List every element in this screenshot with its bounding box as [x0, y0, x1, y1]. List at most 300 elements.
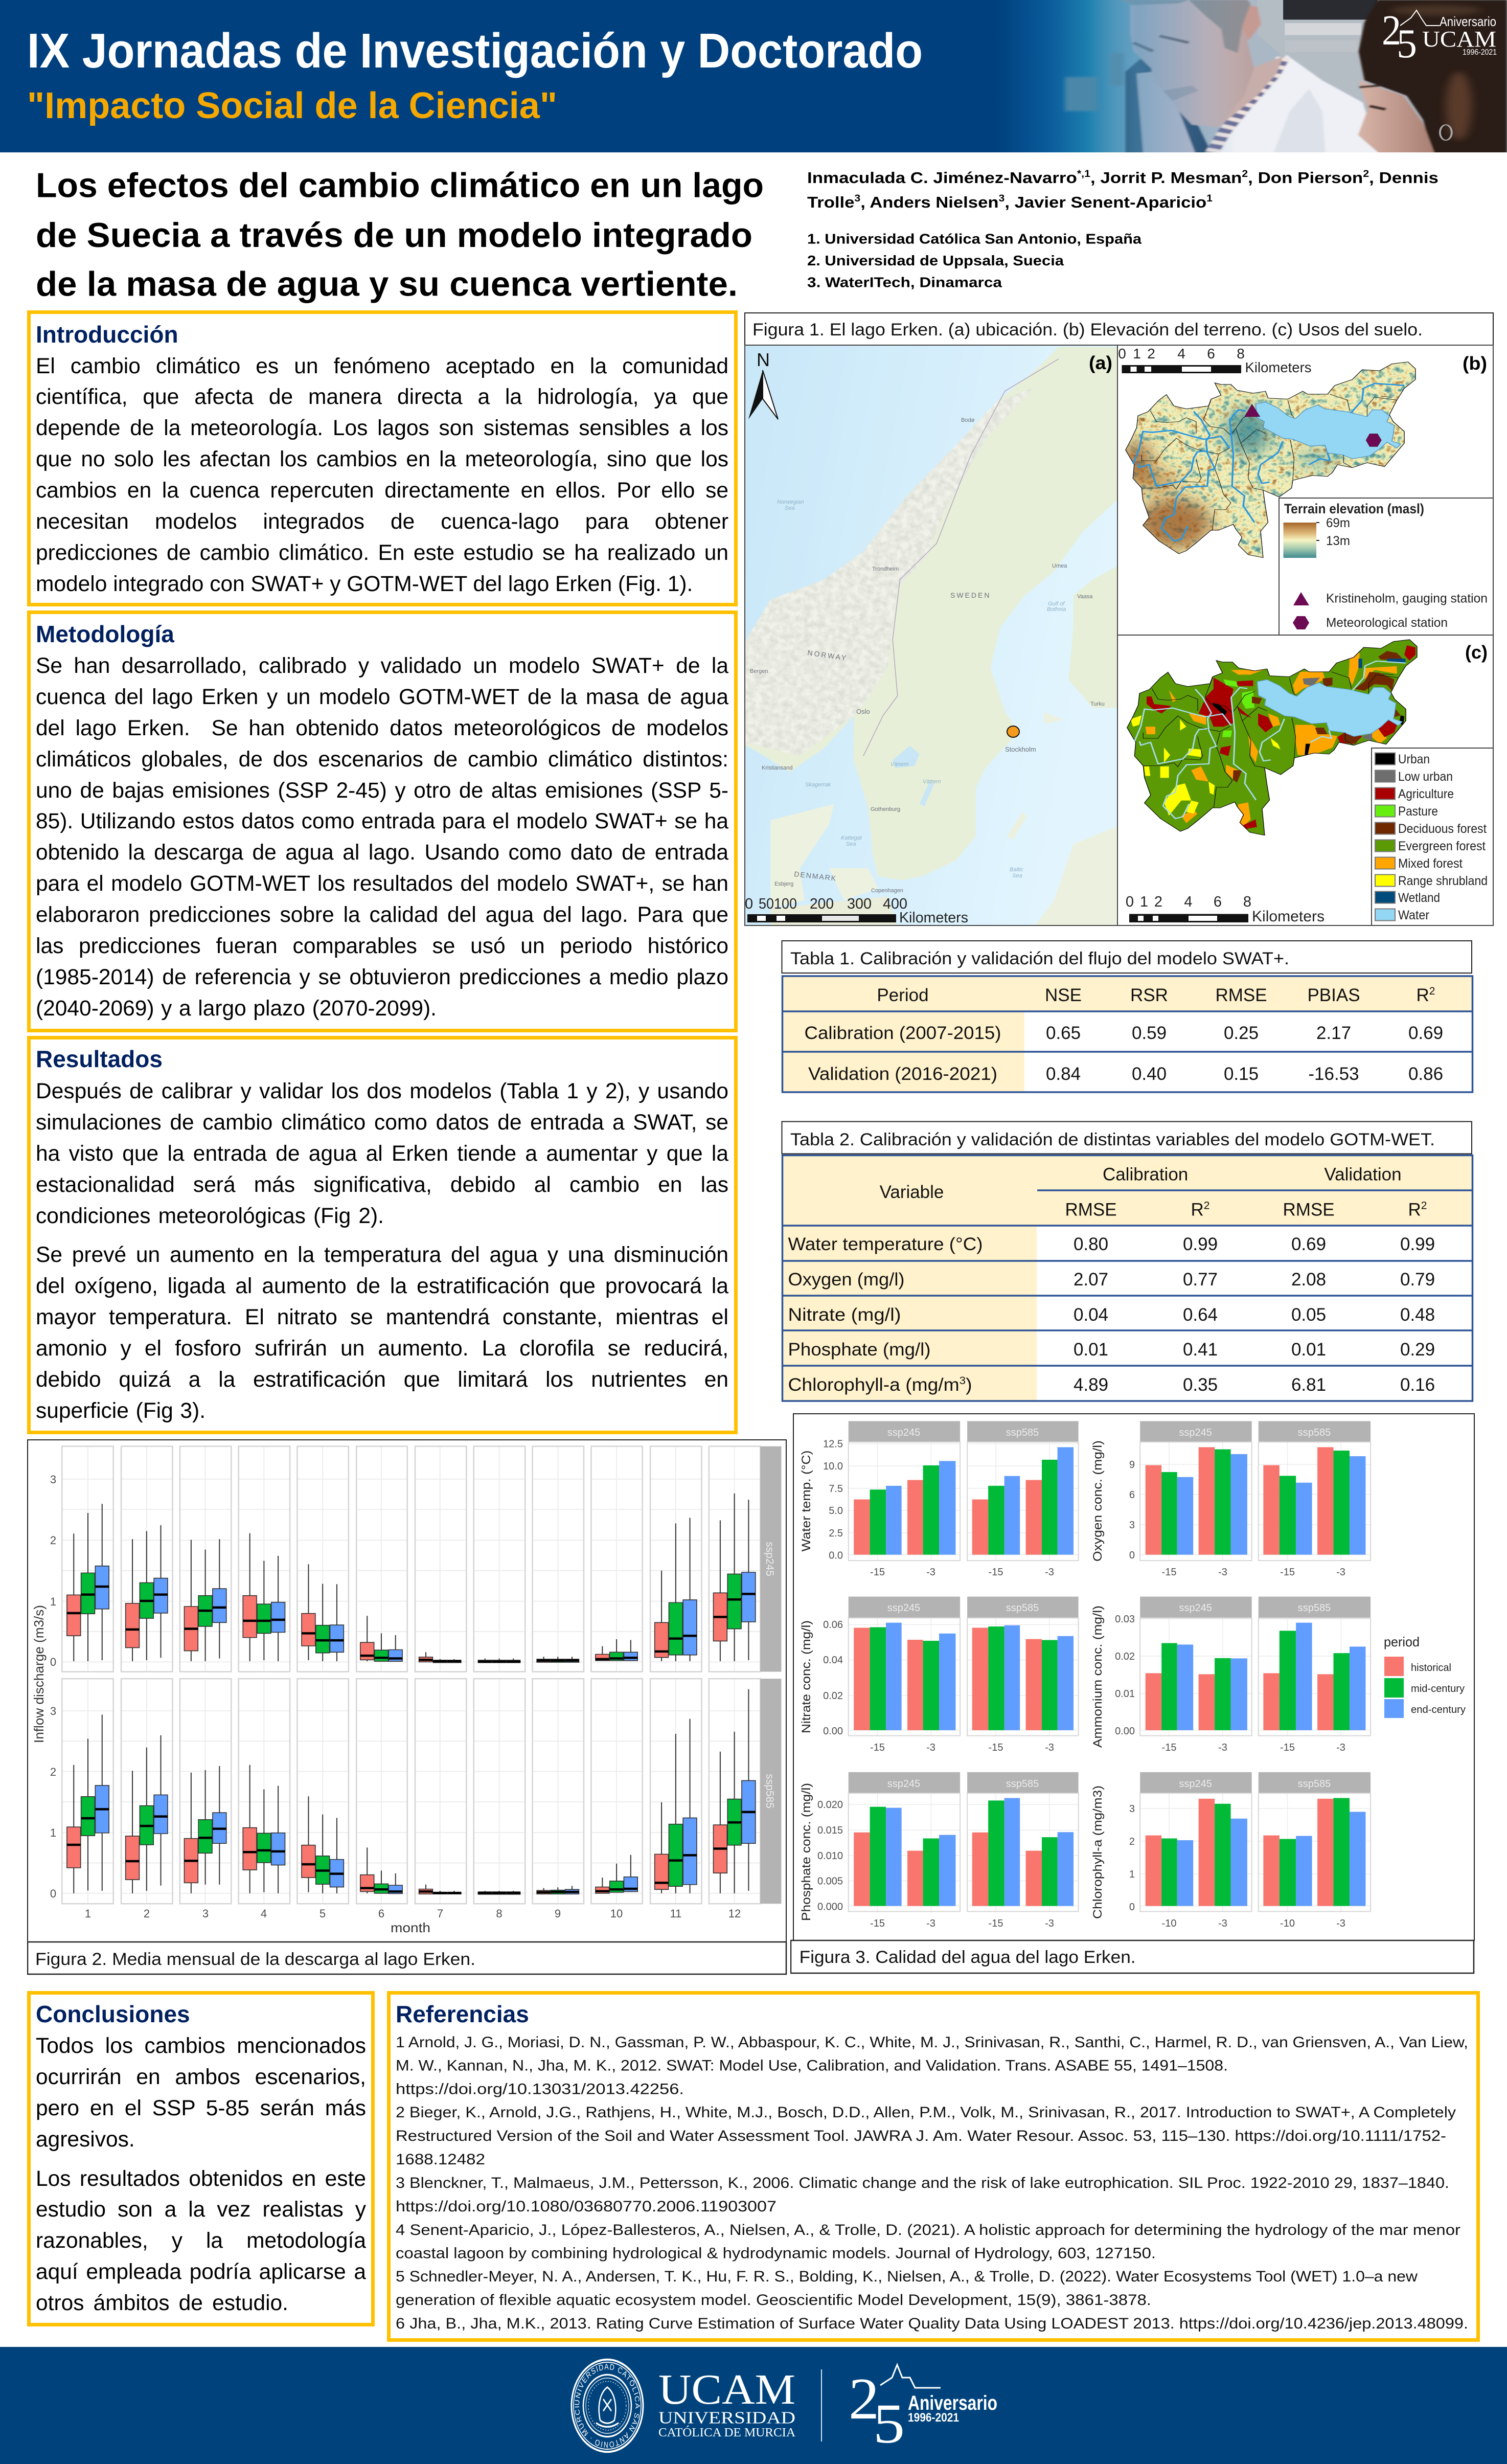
chart row 1: water temperature and oxygen: -15 — [1280, 1567, 1295, 1578]
authors and affiliations: 3 — [854, 193, 860, 204]
heading: conclusiones: Conclusiones — [36, 2001, 190, 2027]
scale bar a: 300 — [847, 896, 872, 912]
chart row 3: phosphate and chlorophyll: 0.005 — [817, 1875, 843, 1887]
chart row 1: water temperature and oxygen: ssp585 — [1006, 1427, 1039, 1438]
chart row 2: nitrate and ammonium: -3 — [926, 1742, 935, 1753]
text: conclusiones: pero en el SSP 5-85 serán más — [36, 2096, 366, 2120]
text: conclusiones: agresivos. — [36, 2128, 135, 2152]
map labels: Vänern — [890, 761, 908, 767]
reference list: 5 Schnedler-Meyer, N. A., Andersen, T. K., Hu, F. R. S., Bolding, K., Nielsen, A., & Trolle, D. (2022). Water Ecosystems Tool (WET) 1.0–a new — [396, 2268, 1418, 2285]
figure 3 frame — [793, 1414, 1474, 1940]
table 2 body: Calibration — [1103, 1165, 1188, 1185]
boxes: end-century — [95, 1566, 756, 1894]
map labels: Umea — [1052, 563, 1067, 569]
text: metodología: del lago Erken. Se han obtenido datos meteorológicos de modelos — [36, 716, 728, 740]
table 1 caption — [782, 941, 1472, 973]
table 1 body: 0.69 — [1408, 1023, 1443, 1043]
chart row 3: phosphate and chlorophyll: 2 — [1129, 1836, 1135, 1847]
logo: university seal: UNIVERSIDAD CATÓLICA SAN ANTONIO · MURCIA · — [575, 2364, 640, 2448]
table 1 body: Calibration (2007-2015) — [805, 1023, 1001, 1043]
reference list: coastal lagoon by combining hydrological & hydrodynamic models. Journal of Hydrology, 603, 127150. — [396, 2245, 1156, 2262]
chart row 3: phosphate and chlorophyll: -3 — [1045, 1918, 1054, 1929]
table 2 body — [782, 1156, 1472, 1401]
reference list: 1 Arnold, J. G., Moriasi, D. N., Gassman, P. W., Abbaspour, K. C., White, M. J., Srinivasan, R., Santhi, C., Harmel, R. D., van Griensven, A., Van Liew, — [396, 2034, 1468, 2051]
logo: 25 aniversario UCAM: Aniversario — [1440, 14, 1496, 29]
map a: location of lake Erken in Sweden — [741, 345, 1122, 926]
chart row 2: nitrate and ammonium: -3 — [1045, 1742, 1054, 1753]
chart row 3: phosphate and chlorophyll: -15 — [989, 1918, 1003, 1929]
text: resultados: Después de calibrar y validar los dos modelos (Tabla 1 y 2), y usando — [36, 1079, 728, 1103]
scale bar b: 4 — [1177, 346, 1185, 361]
icon: north arrow — [748, 349, 778, 419]
authors and affiliations: Trolle — [807, 193, 850, 211]
y axis labels: 0 — [50, 1887, 56, 1900]
text: introducción — [36, 354, 728, 596]
map labels: Sea — [785, 505, 795, 511]
event title: IX Jornadas de Investigación y Doctorado — [27, 24, 923, 78]
table 1 body: Validation (2016-2021) — [808, 1064, 997, 1084]
strip labels: ssp585 — [764, 1774, 775, 1809]
chart row 1: water temperature and oxygen: -3 — [1045, 1567, 1054, 1578]
table 2 body: 0.69 — [1291, 1234, 1326, 1254]
x axis labels: 9 — [555, 1907, 561, 1920]
authors and affiliations: , Anders Nielsen — [860, 193, 999, 211]
text: resultados: estacionalidad será más significativa, debido al cambio en las — [36, 1173, 728, 1197]
text: metodología: obtenido la descarga de agua al lago. Usando como dato de entrada — [36, 841, 728, 865]
logo: UCAM wordmark: UCAM — [658, 2366, 795, 2413]
x axis labels: 4 — [261, 1907, 267, 1920]
map labels: NORWAY — [807, 648, 848, 662]
table 2 body: Water temperature (°C) — [788, 1234, 983, 1254]
figure 2 caption — [28, 1942, 786, 1974]
table 1 body: RMSE — [1215, 985, 1267, 1005]
table 1 body: 2 — [1429, 985, 1435, 997]
chart row 2: nitrate and ammonium: ssp585 — [1006, 1602, 1039, 1614]
reference list: 2 Bieger, K., Arnold, J.G., Rathjens, H., White, M.J., Bosch, D.D., Allen, P.M., Volk, M., Srinivasan, R., 2017. Introduction to SWAT+, A Completely — [396, 2104, 1456, 2121]
map c: land use — [1117, 635, 1493, 925]
authors and affiliations: *,1 — [1077, 169, 1090, 179]
text: resultados: Se prevé un aumento en la temperatura del agua y una disminución — [36, 1243, 728, 1267]
figure 1 caption — [745, 313, 1493, 345]
marker: lake Erken location — [1007, 726, 1019, 737]
text: introducción: necesitan modelos integrados de cuenca-lago para obtener — [36, 510, 728, 534]
label b: (b) — [1463, 353, 1487, 374]
authors and affiliations: 3. WaterITech, Dinamarca — [807, 274, 1002, 290]
x axis labels: 5 — [319, 1907, 326, 1920]
map labels: Gothenburg — [871, 806, 900, 812]
table 2 body: R — [1191, 1200, 1204, 1220]
text: conclusiones: razonables, y la metodología — [36, 2229, 366, 2253]
panel: referencias — [387, 1991, 1480, 2342]
chart legend: period: historical — [1411, 1662, 1451, 1674]
header photo — [997, 0, 1507, 153]
map labels: Gulf of — [1048, 601, 1065, 607]
table 1 body: NSE — [1045, 985, 1082, 1005]
x axis labels: 1 — [85, 1907, 91, 1920]
legend c: Deciduous forest — [1398, 822, 1487, 836]
x axis labels: 7 — [437, 1907, 443, 1920]
event subtitle: "Impacto Social de la Ciencia" — [27, 85, 557, 126]
y axis labels: 3 — [50, 1473, 56, 1486]
table 1 body: 0.15 — [1224, 1064, 1259, 1084]
table 2 body: 2 — [1204, 1200, 1209, 1212]
chart row 2: nitrate and ammonium: ssp245 — [1179, 1602, 1212, 1614]
heading: metodología: Metodología — [36, 621, 174, 647]
chart row 3: phosphate and chlorophyll: ssp245 — [1179, 1778, 1212, 1790]
poster title: de Suecia a través de un modelo integrado — [36, 216, 752, 255]
map labels: Sea — [1012, 873, 1022, 879]
text: conclusiones — [36, 2031, 366, 2319]
scale bar b — [1118, 346, 1312, 375]
logo: 25 aniversario UCAM: UCAM — [1422, 27, 1496, 52]
panel: metodología — [27, 611, 738, 1032]
marker: meteorological station — [1366, 434, 1382, 447]
table 2 body: 0.29 — [1400, 1340, 1435, 1360]
text: metodología: (1985-2014) de referencia y se obtuvieron predicciones a medio plazo — [36, 965, 728, 989]
map labels: Bodø — [961, 417, 975, 423]
heading: referencias: Referencias — [396, 2001, 529, 2027]
table 2 body: R — [1408, 1200, 1421, 1220]
text: metodología — [36, 654, 728, 1021]
map labels: SWEDEN — [950, 591, 991, 599]
authors and affiliations: 2 — [1242, 169, 1248, 179]
x axis labels — [85, 1907, 741, 1935]
chart row 1: water temperature and oxygen: ssp245 — [1179, 1427, 1212, 1438]
legend c: Agriculture — [1398, 787, 1454, 801]
text: resultados — [36, 1079, 728, 1423]
table 2 body: 0.99 — [1400, 1234, 1435, 1254]
text: metodología: elaboraron predicciones sobre la calidad del agua del lago. Para que — [36, 903, 728, 927]
map labels: Trondheim — [872, 566, 899, 572]
x axis labels: 3 — [202, 1907, 209, 1920]
map labels: Oslo — [856, 708, 870, 715]
table 2 body: 6.81 — [1291, 1375, 1326, 1395]
map labels: Kristiansand — [762, 765, 793, 771]
reference list: Restructured Version of the Soil and Water Assessment Tool. JAWRA J. Am. Water Resour. Assoc. 53, 115–130. https://doi.org/10.1111/1752- — [396, 2128, 1446, 2144]
logo: 25 aniversario UCAM: 2 — [1382, 7, 1401, 54]
table 1 body: 0.59 — [1132, 1023, 1167, 1043]
text: introducción: El cambio climático es un fenómeno aceptado en la comunidad — [36, 354, 728, 378]
scale bar c: 1 — [1140, 894, 1148, 910]
chart row 3: phosphate and chlorophyll — [800, 1772, 1371, 1929]
legend c: Mixed forest — [1398, 856, 1463, 871]
table 2 body: 2 — [1421, 1200, 1427, 1212]
logo: 25 aniversario — [849, 2365, 997, 2455]
text: introducción: depende de la meteorología. Los lagos son sistemas sensibles a los — [36, 416, 728, 440]
chart row 3: phosphate and chlorophyll: ssp585 — [1006, 1778, 1039, 1790]
legend c: Pasture — [1398, 804, 1438, 819]
authors and affiliations: 2 — [1363, 169, 1369, 179]
logo: 25 aniversario: 5 — [873, 2392, 905, 2455]
footer band with logos — [0, 2347, 1507, 2464]
table 1 body: 0.25 — [1224, 1023, 1259, 1043]
text: conclusiones: Los resultados obtenidos en este — [36, 2167, 366, 2191]
table 2 body: Phosphate (mg/l) — [788, 1340, 930, 1360]
scale bar a: 0 — [745, 896, 753, 912]
label a: (a) — [1089, 352, 1112, 373]
map labels: Sea — [846, 841, 856, 847]
y axis labels: 1 — [50, 1595, 56, 1608]
text: resultados: ha visto que la entrada de agua al Erken tiende a aumentar y que la — [36, 1142, 728, 1166]
chart row 2: nitrate and ammonium: -3 — [1336, 1742, 1345, 1753]
chart row 3: phosphate and chlorophyll: -3 — [926, 1918, 935, 1929]
logo: UCAM wordmark: UNIVERSIDAD — [658, 2408, 795, 2428]
logo: UCAM wordmark: CATÓLICA DE MURCIA — [658, 2426, 796, 2439]
text: resultados: debido quizá a la estratificación que limitará los nutrientes en — [36, 1368, 728, 1392]
chart row 3: phosphate and chlorophyll: 0.015 — [817, 1825, 843, 1836]
chart row 3: phosphate and chlorophyll: 3 — [1129, 1803, 1135, 1815]
scale bar a: 400 — [883, 896, 907, 912]
text: conclusiones: aquí empleada podría aplicarse a — [36, 2260, 366, 2284]
strip labels: ssp245 — [764, 1542, 775, 1576]
map labels: Bergen — [750, 668, 768, 674]
logo: 25 aniversario: 1996-2021 — [908, 2411, 959, 2425]
scale bar b: Kilometers — [1245, 359, 1312, 375]
scale bar a — [745, 896, 968, 926]
scale bar b: 2 — [1147, 346, 1155, 361]
chart row 2: nitrate and ammonium: 0.03 — [1115, 1614, 1135, 1625]
icon: north arrow: N — [757, 349, 770, 370]
x axis labels: 11 — [670, 1907, 681, 1920]
text: introducción: científica, que afecta de manera directa a la hidrología, ya que — [36, 385, 728, 409]
chart row 1: water temperature and oxygen: -15 — [870, 1567, 885, 1578]
chart legend: period: mid-century — [1411, 1683, 1465, 1694]
x axis labels: month — [391, 1920, 430, 1935]
chart row 3: phosphate and chlorophyll: ssp585 — [1298, 1778, 1331, 1790]
panel: resultados — [27, 1036, 738, 1434]
y axis labels: 2 — [50, 1534, 56, 1547]
figure 1 caption: Figura 1. El lago Erken. (a) ubicación. (b) Elevación del terreno. (c) Usos del suelo. — [752, 320, 1423, 340]
authors and affiliations: 1. Universidad Católica San Antonio, España — [807, 231, 1141, 246]
header banner — [0, 0, 1507, 152]
logo: 25 aniversario UCAM: 1996-2021 — [1463, 48, 1497, 57]
scale bar a: 200 — [810, 896, 834, 912]
table 1 body: RSR — [1130, 985, 1168, 1005]
map labels: Vättern — [923, 779, 941, 785]
table 2 body: 0.01 — [1291, 1340, 1326, 1360]
scale bar b: 6 — [1207, 346, 1215, 361]
chart row 1: water temperature and oxygen: ssp245 — [887, 1427, 920, 1438]
text: resultados: del oxígeno, ligada al aumento de la estratificación que provocará la — [36, 1274, 728, 1298]
chart row 3: phosphate and chlorophyll: -10 — [1280, 1918, 1295, 1929]
map labels: DENMARK — [794, 870, 837, 883]
reference list: https://doi.org/10.1080/03680770.2006.11903007 — [396, 2198, 777, 2215]
chart row 3: phosphate and chlorophyll: -3 — [1218, 1918, 1227, 1929]
text: metodología: cuenca del lago Erken y un modelo GOTM-WET de la masa de agua — [36, 685, 728, 709]
text: conclusiones: estudio son a la vez realistas y — [36, 2198, 366, 2222]
text: resultados: amonio y el fosforo sufrirán un aumento. La clorofila se reducirá, — [36, 1337, 728, 1361]
table 1 body: 0.65 — [1046, 1023, 1081, 1043]
legend c: Low urban — [1398, 770, 1453, 784]
text: conclusiones: ocurrirán en ambos escenarios, — [36, 2065, 366, 2089]
map labels: Turku — [1090, 701, 1105, 707]
table 2 body: 0.01 — [1074, 1340, 1108, 1360]
table 2 body: 0.48 — [1400, 1305, 1435, 1325]
chart row 1: water temperature and oxygen: Water temp. (°C) — [800, 1450, 813, 1551]
table 2 body: ) — [966, 1375, 972, 1395]
table 2 body: 0.41 — [1183, 1340, 1218, 1360]
scale bar b: 0 — [1118, 346, 1126, 361]
chart row 1: water temperature and oxygen: 10.0 — [823, 1461, 843, 1472]
chart row 2: nitrate and ammonium: 0.02 — [1115, 1651, 1135, 1662]
chart row 1: water temperature and oxygen: 6 — [1129, 1489, 1135, 1501]
chart row 2: nitrate and ammonium: Nitrate conc. (mg/l) — [800, 1620, 813, 1733]
chart row 2: nitrate and ammonium: ssp245 — [887, 1602, 920, 1614]
reference list — [387, 2029, 1480, 2336]
text: introducción: predicciones de cambio climático. En este estudio se ha realizado un — [36, 541, 728, 565]
scale bar c: 8 — [1243, 894, 1251, 910]
x axis labels: 12 — [728, 1907, 741, 1920]
table 2 body: 0.05 — [1291, 1305, 1326, 1325]
table 2 body: Validation — [1324, 1165, 1402, 1185]
poster title: Los efectos del cambio climático en un lago — [36, 166, 764, 205]
chart row 1: water temperature and oxygen: -15 — [989, 1567, 1003, 1578]
legend b: Kristineholm, gauging station — [1326, 591, 1488, 605]
y axis labels: 1 — [50, 1826, 56, 1839]
reference list: 4 Senent-Aparicio, J., López-Ballesteros, A., Nielsen, A., & Trolle, D. (2021). A holistic approach for determining the hydrology of the mar menor — [396, 2222, 1460, 2239]
map labels: Norwegian — [777, 499, 804, 505]
boxes: mid-century — [81, 1573, 741, 1894]
text: metodología: Se han desarrollado, calibrado y validado un modelo SWAT+ de la — [36, 654, 728, 678]
legend c: Water — [1398, 908, 1429, 922]
legend c: Range shrubland — [1398, 874, 1488, 888]
reference list: 3 Blenckner, T., Malmaeus, J.M., Pettersson, K., 2006. Climatic change and the risk of lake eutrophication. SIL Proc. 1922-2010 29, 1837–1840. — [396, 2175, 1449, 2191]
x axis labels: 10 — [610, 1907, 623, 1920]
table 2 body: 0.35 — [1183, 1375, 1218, 1395]
chart row 1: water temperature and oxygen: 9 — [1129, 1459, 1135, 1471]
chart row 3: phosphate and chlorophyll: 0.020 — [817, 1799, 843, 1811]
reference list: M. W., Kannan, N., Jha, M. K., 2012. SWAT: Model Use, Calibration, and Validation. Trans. ASABE 55, 1491–1508. — [396, 2058, 1228, 2074]
legend b: 13m — [1326, 534, 1350, 548]
chart row 3: phosphate and chlorophyll: -3 — [1336, 1918, 1345, 1929]
table 1 body: 0.40 — [1132, 1064, 1167, 1084]
table 2 body: 0.04 — [1074, 1305, 1108, 1325]
catchment land use map — [1127, 640, 1417, 835]
table 2 body: RMSE — [1065, 1200, 1117, 1220]
chart row 2: nitrate and ammonium: -15 — [870, 1742, 885, 1753]
y axis labels: 3 — [50, 1705, 56, 1717]
chart row 1: water temperature and oxygen: 0 — [1129, 1550, 1135, 1561]
chart row 2: nitrate and ammonium: 0.06 — [823, 1619, 843, 1631]
panel: introducción — [27, 310, 738, 606]
logo: 25 aniversario: 2 — [849, 2366, 879, 2432]
table 2 caption — [782, 1122, 1472, 1154]
table 2 body: Variable — [880, 1182, 944, 1202]
chart row 1: water temperature and oxygen: 3 — [1129, 1520, 1135, 1531]
legend b — [1279, 498, 1493, 635]
table 2 caption: Tabla 2. Calibración y validación de distintas variables del modelo GOTM-WET. — [790, 1130, 1435, 1149]
map labels: Bothnia — [1047, 606, 1066, 613]
chart legend: period: end-century — [1411, 1704, 1466, 1715]
y axis labels: 2 — [50, 1766, 56, 1778]
marker: gauging station — [1244, 404, 1260, 417]
authors and affiliations: Inmaculada C. Jiménez-Navarro — [807, 169, 1047, 187]
figure 1: maps of lake Erken — [744, 312, 1494, 926]
x axis labels: 8 — [496, 1907, 503, 1920]
figure 3 caption: Figura 3. Calidad del agua del lago Erken. — [800, 1948, 1136, 1967]
chart row 3: phosphate and chlorophyll: Chlorophyll-a (mg/m3) — [1091, 1785, 1105, 1919]
heading: resultados: Resultados — [36, 1046, 163, 1072]
chart legend: period: period — [1384, 1634, 1420, 1649]
legend c: Evergreen forest — [1398, 839, 1486, 853]
logo: 25 aniversario: Aniversario — [908, 2392, 997, 2414]
text: conclusiones: Todos los cambios mencionados — [36, 2034, 366, 2058]
x axis labels: 2 — [144, 1907, 150, 1920]
table 2 body: 4.89 — [1074, 1375, 1108, 1395]
chart row 1: water temperature and oxygen: -3 — [926, 1567, 935, 1578]
scale bar a: Kilometers — [899, 910, 968, 926]
authors and affiliations: 1 — [1206, 193, 1213, 204]
chart row 2: nitrate and ammonium: 0.04 — [823, 1655, 843, 1666]
legend c: Wetland — [1398, 891, 1440, 905]
chart row 2: nitrate and ammonium: 0.00 — [1115, 1726, 1135, 1737]
text: resultados: simulaciones de cambio climático como datos de entrada a SWAT, se — [36, 1111, 728, 1135]
figure 3 caption — [791, 1940, 1474, 1973]
text: introducción: que no solo les afectan los cambios en la meteorología, sino que los — [36, 447, 728, 471]
panel: conclusiones — [27, 1991, 375, 2326]
table 1 body — [782, 976, 1472, 1092]
text: metodología: las predicciones fueran comparables se usó un periodo histórico — [36, 934, 728, 958]
legend b: Terrain elevation (masl) — [1284, 501, 1424, 516]
table 1 body: 2.17 — [1316, 1023, 1351, 1043]
table 2 body: Nitrate (mg/l) — [788, 1305, 901, 1325]
chart row 1: water temperature and oxygen: Oxygen conc. (mg/l) — [1091, 1440, 1105, 1562]
table 1: SWAT+ calibration — [781, 940, 1473, 1093]
table 2 body: 0.80 — [1074, 1234, 1108, 1254]
y axis labels — [31, 1473, 56, 1900]
chart row 3: phosphate and chlorophyll: 0.010 — [817, 1850, 843, 1862]
chart row 2: nitrate and ammonium: ssp585 — [1298, 1602, 1331, 1614]
reference list: generation of flexible aquatic ecosystem model. Geoscientific Model Development, 15(9), 3861-3878. — [396, 2292, 1151, 2309]
map labels: Stockholm — [1005, 745, 1036, 753]
poster title: de la masa de agua y su cuenca vertiente. — [36, 265, 738, 304]
chart row 3: phosphate and chlorophyll: 1 — [1129, 1869, 1135, 1880]
legend c — [1372, 748, 1493, 925]
scale bar c: 4 — [1184, 894, 1193, 910]
legend b: 69m — [1326, 516, 1350, 530]
medians — [67, 1587, 756, 1893]
chart row 1: water temperature and oxygen — [800, 1421, 1371, 1578]
boxes: historical — [67, 1593, 727, 1894]
figure 2: monthly inflow boxplots — [27, 1439, 787, 1975]
whiskers — [74, 1494, 748, 1894]
table 2 body: 0.99 — [1183, 1234, 1218, 1254]
heading: introducción: Introducción — [36, 321, 178, 348]
label c: (c) — [1465, 642, 1488, 663]
chart row 1: water temperature and oxygen: 7.5 — [829, 1483, 843, 1495]
scale bar b: 1 — [1133, 346, 1141, 361]
scale bar a: 50100 — [759, 896, 797, 912]
chart row 3: phosphate and chlorophyll: ssp245 — [887, 1778, 920, 1790]
table 1 body: 0.84 — [1046, 1064, 1081, 1084]
map b: terrain elevation — [1114, 345, 1493, 635]
scale bar c: 6 — [1214, 894, 1222, 910]
scale bar c — [1126, 894, 1325, 925]
text: resultados: superficie (Fig 3). — [36, 1399, 206, 1423]
chart row 2: nitrate and ammonium: -15 — [989, 1742, 1003, 1753]
table 2 body: 0.77 — [1183, 1270, 1218, 1290]
authors and affiliations: 3 — [999, 193, 1004, 204]
figure 2 frame — [28, 1440, 786, 1942]
text: conclusiones: otros ámbitos de estudio. — [36, 2291, 288, 2315]
x axis labels: 6 — [378, 1907, 384, 1920]
chart row 2: nitrate and ammonium — [800, 1597, 1371, 1753]
chart row 1: water temperature and oxygen: -15 — [1162, 1567, 1176, 1578]
table 2 body: RMSE — [1283, 1200, 1335, 1220]
table 2 body: 0.16 — [1400, 1375, 1435, 1395]
figure 3: water quality bar charts — [790, 1413, 1475, 1974]
authors and affiliations: , Don Pierson — [1248, 169, 1363, 187]
